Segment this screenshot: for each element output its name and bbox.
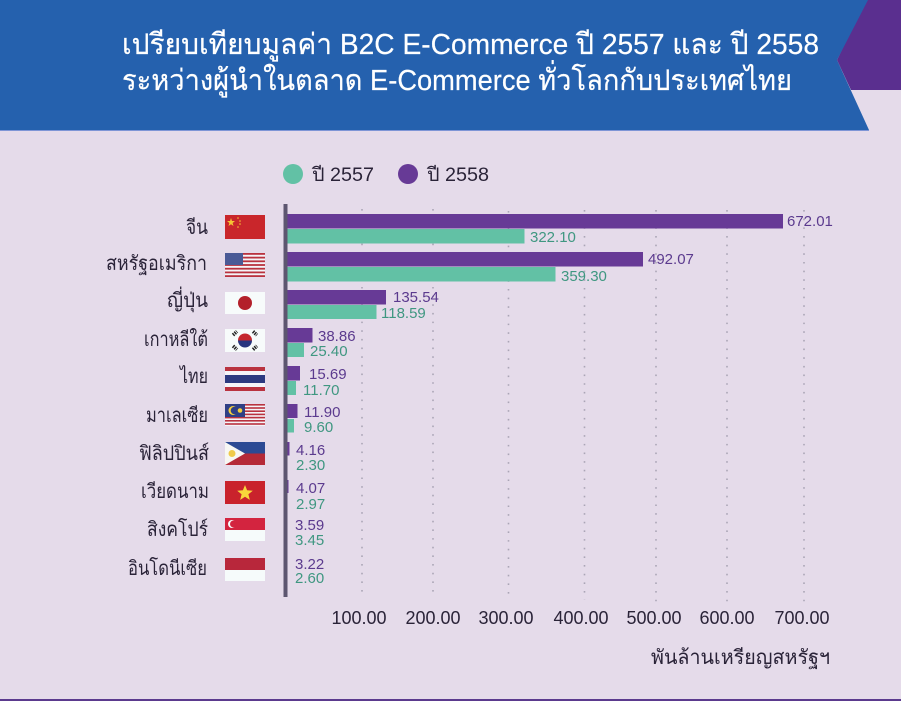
- ribbon fold: [837, 0, 901, 90]
- values 2557: 359.30: [561, 268, 607, 285]
- x axis labels: 200.00: [405, 608, 461, 628]
- x axis labels: 700.00: [774, 608, 830, 628]
- values 2558: [295, 213, 833, 573]
- values 2558: 672.01: [787, 213, 833, 230]
- flag: Indonesia: [225, 558, 265, 581]
- row labels: [106, 217, 209, 580]
- row labels: เกาหลีใต้: [144, 328, 208, 351]
- values 2557: 11.70: [303, 382, 339, 399]
- values 2557: 322.10: [530, 229, 576, 246]
- values 2558: 38.86: [318, 328, 356, 345]
- x axis labels: 400.00: [553, 608, 609, 628]
- x axis labels: 100.00: [331, 608, 387, 628]
- x axis labels: 300.00: [478, 608, 534, 628]
- flag: Philippines: [225, 442, 265, 465]
- bars 2558: [287, 214, 783, 493]
- row labels: จีน: [186, 217, 208, 239]
- row labels: มาเลเซีย: [146, 405, 208, 427]
- values 2558: 11.90: [304, 404, 340, 421]
- title: เปรียบเทียบมูลค่า B2C E-Commerce ปี 2557 และ ปี 2558: [122, 29, 819, 62]
- flag: Thailand: [225, 367, 265, 391]
- flag: China: [225, 215, 265, 239]
- values 2558: 492.07: [648, 251, 694, 268]
- values 2557: 2.60: [295, 570, 324, 587]
- axis unit: พันล้านเหรียญสหรัฐฯ: [651, 647, 830, 669]
- gridlines: [362, 209, 804, 602]
- legend: ปี 2558: [426, 164, 489, 186]
- values 2557: 118.59: [381, 305, 426, 322]
- values 2558: 15.69: [309, 366, 347, 383]
- values 2558: 4.07: [296, 480, 325, 497]
- flag: South Korea: [225, 329, 265, 352]
- row labels: อินโดนีเซีย: [128, 557, 207, 580]
- values 2557: 2.30: [296, 457, 325, 474]
- values 2557: 25.40: [310, 343, 348, 360]
- x axis labels: [331, 608, 830, 628]
- legend: ปี 2557: [311, 164, 374, 186]
- values 2557: [295, 229, 607, 587]
- flag: Japan: [225, 292, 265, 314]
- values 2558: 135.54: [393, 289, 439, 306]
- flag: USA: [225, 253, 265, 277]
- bars 2557: [287, 229, 556, 432]
- values 2558: 3.22: [295, 556, 324, 573]
- vertical axis: [284, 204, 288, 597]
- row labels: ไทย: [178, 365, 208, 388]
- row labels: สหรัฐอเมริกา: [106, 253, 207, 275]
- values 2557: 2.97: [296, 496, 325, 513]
- row labels: ฟิลิปปินส์: [139, 442, 209, 465]
- values 2558: 3.59: [295, 517, 324, 534]
- title: [122, 29, 819, 98]
- title banner: [0, 0, 869, 131]
- flag: Vietnam: [225, 481, 265, 504]
- row labels: สิงคโปร์: [147, 518, 208, 541]
- values 2557: 9.60: [304, 419, 333, 436]
- legend: [283, 164, 489, 186]
- row labels: ญี่ปุ่น: [167, 286, 208, 313]
- values 2557: 3.45: [295, 532, 324, 549]
- title: ระหว่างผู้นำในตลาด E-Commerce ทั่วโลกกับประเทศไทย: [122, 60, 792, 98]
- x axis labels: 600.00: [699, 608, 755, 628]
- flag: Malaysia: [225, 404, 265, 426]
- flag: Singapore: [225, 518, 265, 541]
- row labels: เวียดนาม: [141, 481, 209, 503]
- x axis labels: 500.00: [626, 608, 682, 628]
- values 2558: 4.16: [296, 442, 325, 459]
